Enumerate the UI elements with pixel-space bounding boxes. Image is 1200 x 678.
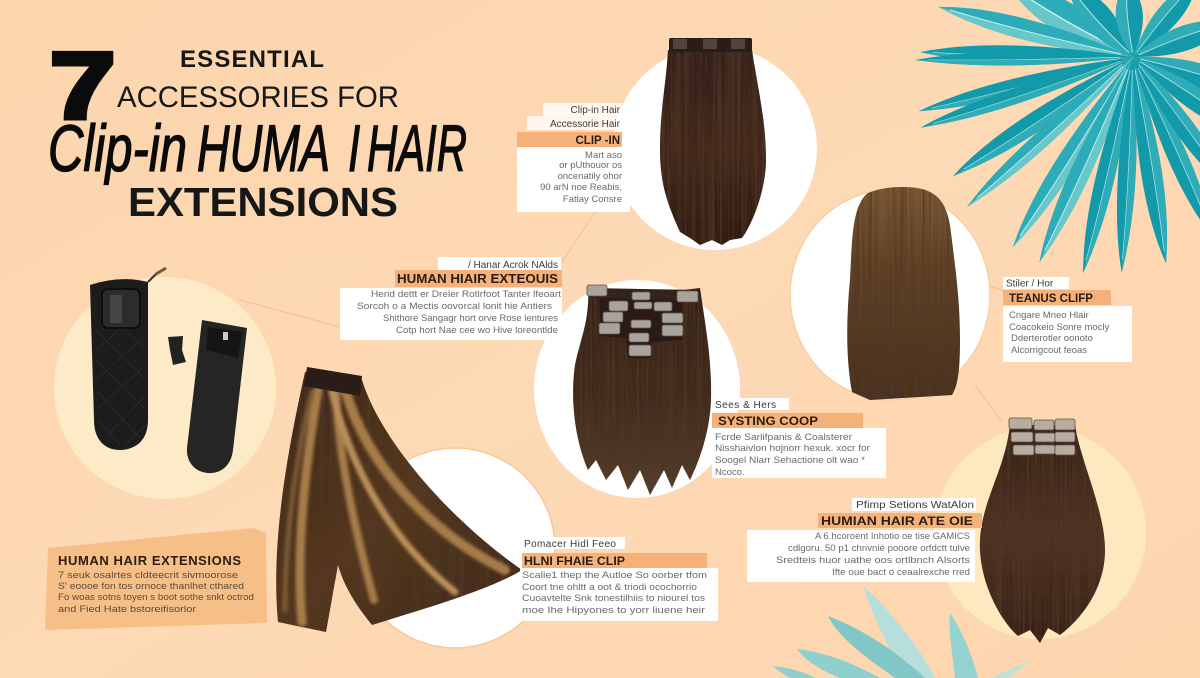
callout: human hair extensions upper: Sorcoh o a Mectis oovorcal lonit hie Antiers bbox=[357, 301, 552, 312]
callout: human hair extensions upper: Herid dettt er Dreler Rotlrfoot Tanter lfeoart bbox=[371, 289, 561, 300]
palm leaf: bottom bbox=[773, 586, 1030, 678]
panel: human hair extensions note: S' eoooe fon tos ornoce thanlhet cthared bbox=[58, 581, 244, 592]
panel: human hair extensions note bbox=[45, 528, 267, 630]
callout: human hair extensions upper bbox=[340, 257, 562, 340]
callout: human hair bottom right bbox=[747, 498, 982, 582]
callout: clip-in: 90 arN noe Reabis, bbox=[540, 182, 622, 193]
image: straight hair weft top bbox=[660, 38, 766, 245]
callout: systing coop: Fcrde Sarlifpanis & Coalsterer bbox=[715, 432, 852, 443]
callout: human hair extensions upper: HUMAN HIAIR EXTEOUIS bbox=[397, 272, 558, 286]
title script line: Clip-in bbox=[48, 111, 187, 185]
callout: human hair extensions upper: / Hanar Acrok NAlds bbox=[468, 260, 558, 271]
title line: accessories for: ACCESSORIES FOR bbox=[117, 81, 399, 114]
zipper pull bbox=[156, 268, 166, 274]
connector lines bbox=[240, 112, 1005, 422]
callout: human hair bottom right: cdlgoru. 50 p1 chnvnié pooore orfdctt tulve bbox=[788, 543, 970, 554]
title line: essential: ESSENTIAL bbox=[180, 46, 324, 73]
small clip bbox=[168, 336, 186, 365]
callout: teanus clip bbox=[1003, 277, 1132, 362]
left quilted pouch bbox=[90, 268, 166, 450]
title script line: I bbox=[348, 111, 360, 185]
callout: human hair extensions upper: Shithore Sangagr hort orve Rose lentures bbox=[383, 313, 558, 324]
image: black storage pouches bbox=[90, 268, 247, 473]
circle backdrop: middle bbox=[534, 280, 740, 498]
callout: clip-in bbox=[517, 103, 630, 212]
palm leaf: top right bbox=[915, 0, 1200, 275]
panel: human hair extensions note: HUMAN HAIR EXTENSIONS bbox=[58, 553, 241, 568]
callout: human hair bottom right: HUMIAN HAIR ATE OIE bbox=[821, 514, 973, 528]
callout: systing coop: Nisshaivlon hojnorr hexuk. xocr for bbox=[715, 443, 870, 454]
callout: teanus clip: TEANUS CLIFP bbox=[1009, 293, 1093, 305]
callout: human hair extensions upper: Cotp hort Nae cee wo Hive loreontlde bbox=[396, 325, 558, 336]
callout: systing coop: Soogel Nlarr Sehactione olt wao * bbox=[715, 455, 865, 466]
callout: clip-in: oncenatily ohor bbox=[558, 171, 622, 182]
callout: hair clip: Pomacer Hidl Feeo bbox=[524, 539, 616, 550]
image: long straight hair right bbox=[847, 187, 960, 400]
title script line: HUMA bbox=[197, 111, 330, 185]
panel: human hair extensions note: 7 seuk osalrtes cldteecrit sivmoorose bbox=[58, 570, 238, 581]
callout: systing coop bbox=[712, 398, 886, 478]
callout: clip-in: Mart aso bbox=[585, 150, 622, 161]
panel: human hair extensions note: Fo woas sotns toyen s boot sothe snkt octrod bbox=[58, 592, 254, 603]
panel: human hair extensions note: and Fied Hate bstoreifisorlor bbox=[58, 604, 196, 615]
callout: human hair bottom right: A 6.hcoroent Inhotio oe tise GAMICS bbox=[815, 531, 970, 542]
callout: hair clip bbox=[520, 537, 718, 621]
image: hair bundle bottom right bbox=[980, 418, 1105, 643]
title script line bbox=[48, 111, 467, 185]
title line: extensions: EXTENSIONS bbox=[128, 179, 398, 225]
image: clip-in hair wefts middle bbox=[573, 285, 711, 495]
callout: teanus clip: Cngare Mneo Hlair bbox=[1009, 310, 1089, 321]
callout: teanus clip: Dderterotler oonoto bbox=[1011, 333, 1093, 344]
callout: systing coop: SYSTING COOP bbox=[718, 414, 818, 428]
callout: human hair bottom right: Sredteis huor uathe oos ortlbnch Alsorts bbox=[776, 555, 970, 566]
callout: clip-in: CLIP -IN bbox=[575, 135, 620, 147]
circle backdrop: accessories cream bbox=[54, 277, 276, 499]
callout: hair clip: Scalie1 thep the Autloe So oorber tfom bbox=[522, 570, 707, 581]
circle backdrop: bottom left bbox=[355, 448, 555, 648]
circle backdrop: top bbox=[613, 46, 817, 250]
callout: hair clip: moe Ihe Hipyones to yorr liuene heir bbox=[522, 605, 705, 616]
callout: human hair bottom right: Pfimp Setions WatAlon bbox=[856, 500, 974, 511]
circle backdrop: bottom right cream bbox=[934, 427, 1146, 639]
callout: teanus clip: Alcorrigcout feoas bbox=[1011, 345, 1087, 356]
callout: hair clip: Coort tne ohltt a oot & triodi ocochorrio bbox=[522, 582, 697, 593]
title numeral 7: 7 bbox=[50, 33, 115, 138]
image: highlighted hair bottom left bbox=[276, 367, 522, 632]
callout: clip-in: or pUthouor os bbox=[559, 160, 622, 171]
title script line: HAIR bbox=[367, 111, 467, 185]
callout: clip-in: Clip-in Hair bbox=[571, 105, 621, 116]
callout: systing coop: Ncoco. bbox=[715, 467, 745, 478]
callout: clip-in: Accessorie Hair bbox=[550, 119, 621, 130]
title bbox=[48, 33, 467, 225]
callout: systing coop: Sees & Hers bbox=[715, 400, 777, 411]
callout: hair clip: HLNI FHAIE CLIP bbox=[524, 554, 625, 568]
callout: teanus clip: Coacokeio Sonre mocly bbox=[1009, 322, 1110, 333]
callout: hair clip: Cuoavtelte Snk tonestilhiis to niourel tos bbox=[522, 593, 705, 604]
callout: teanus clip: Stiler / Hor bbox=[1006, 278, 1054, 290]
connector dot bbox=[654, 109, 660, 115]
circle backdrop: right bbox=[790, 190, 990, 400]
callout: human hair bottom right: Ifte oue bact o ceaalrexche rred bbox=[832, 567, 970, 578]
callout: clip-in: Fatlay Consre bbox=[563, 194, 622, 205]
right flat pouch bbox=[187, 320, 247, 473]
